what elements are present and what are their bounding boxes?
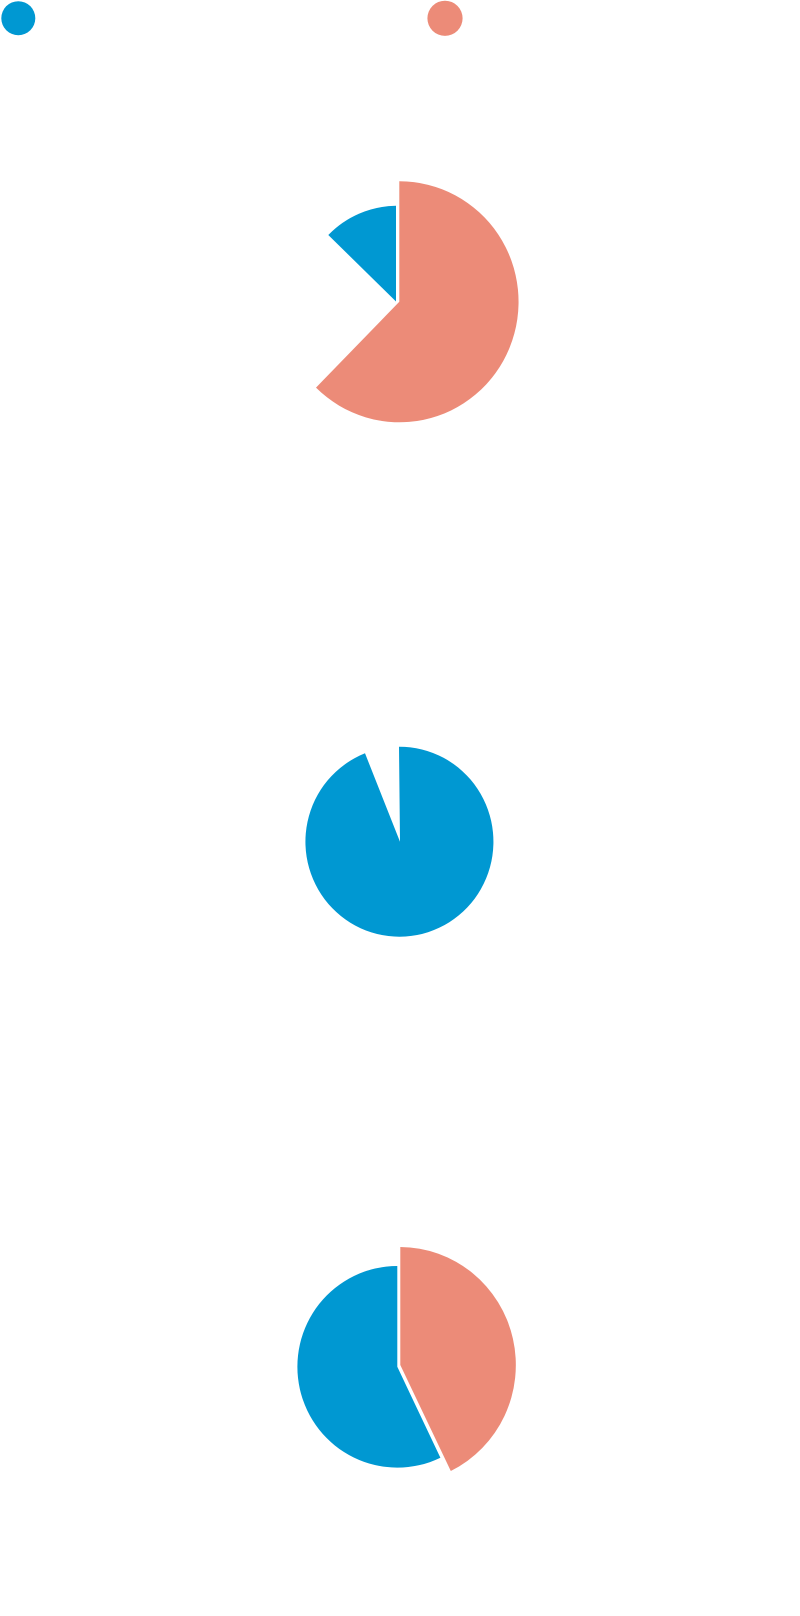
legend dot: blue	[1, 1, 35, 35]
legend dot: salmon	[427, 1, 463, 36]
pie 2 blue slice	[305, 747, 493, 937]
pie 1 salmon slice	[316, 181, 519, 422]
pie chart 1	[316, 181, 519, 422]
pie 1 blue slice	[328, 206, 396, 302]
pie chart 2	[305, 747, 493, 937]
pie 3 salmon slice	[400, 1247, 516, 1471]
pie 3 blue slice	[297, 1266, 440, 1468]
pie chart 3	[297, 1247, 516, 1471]
